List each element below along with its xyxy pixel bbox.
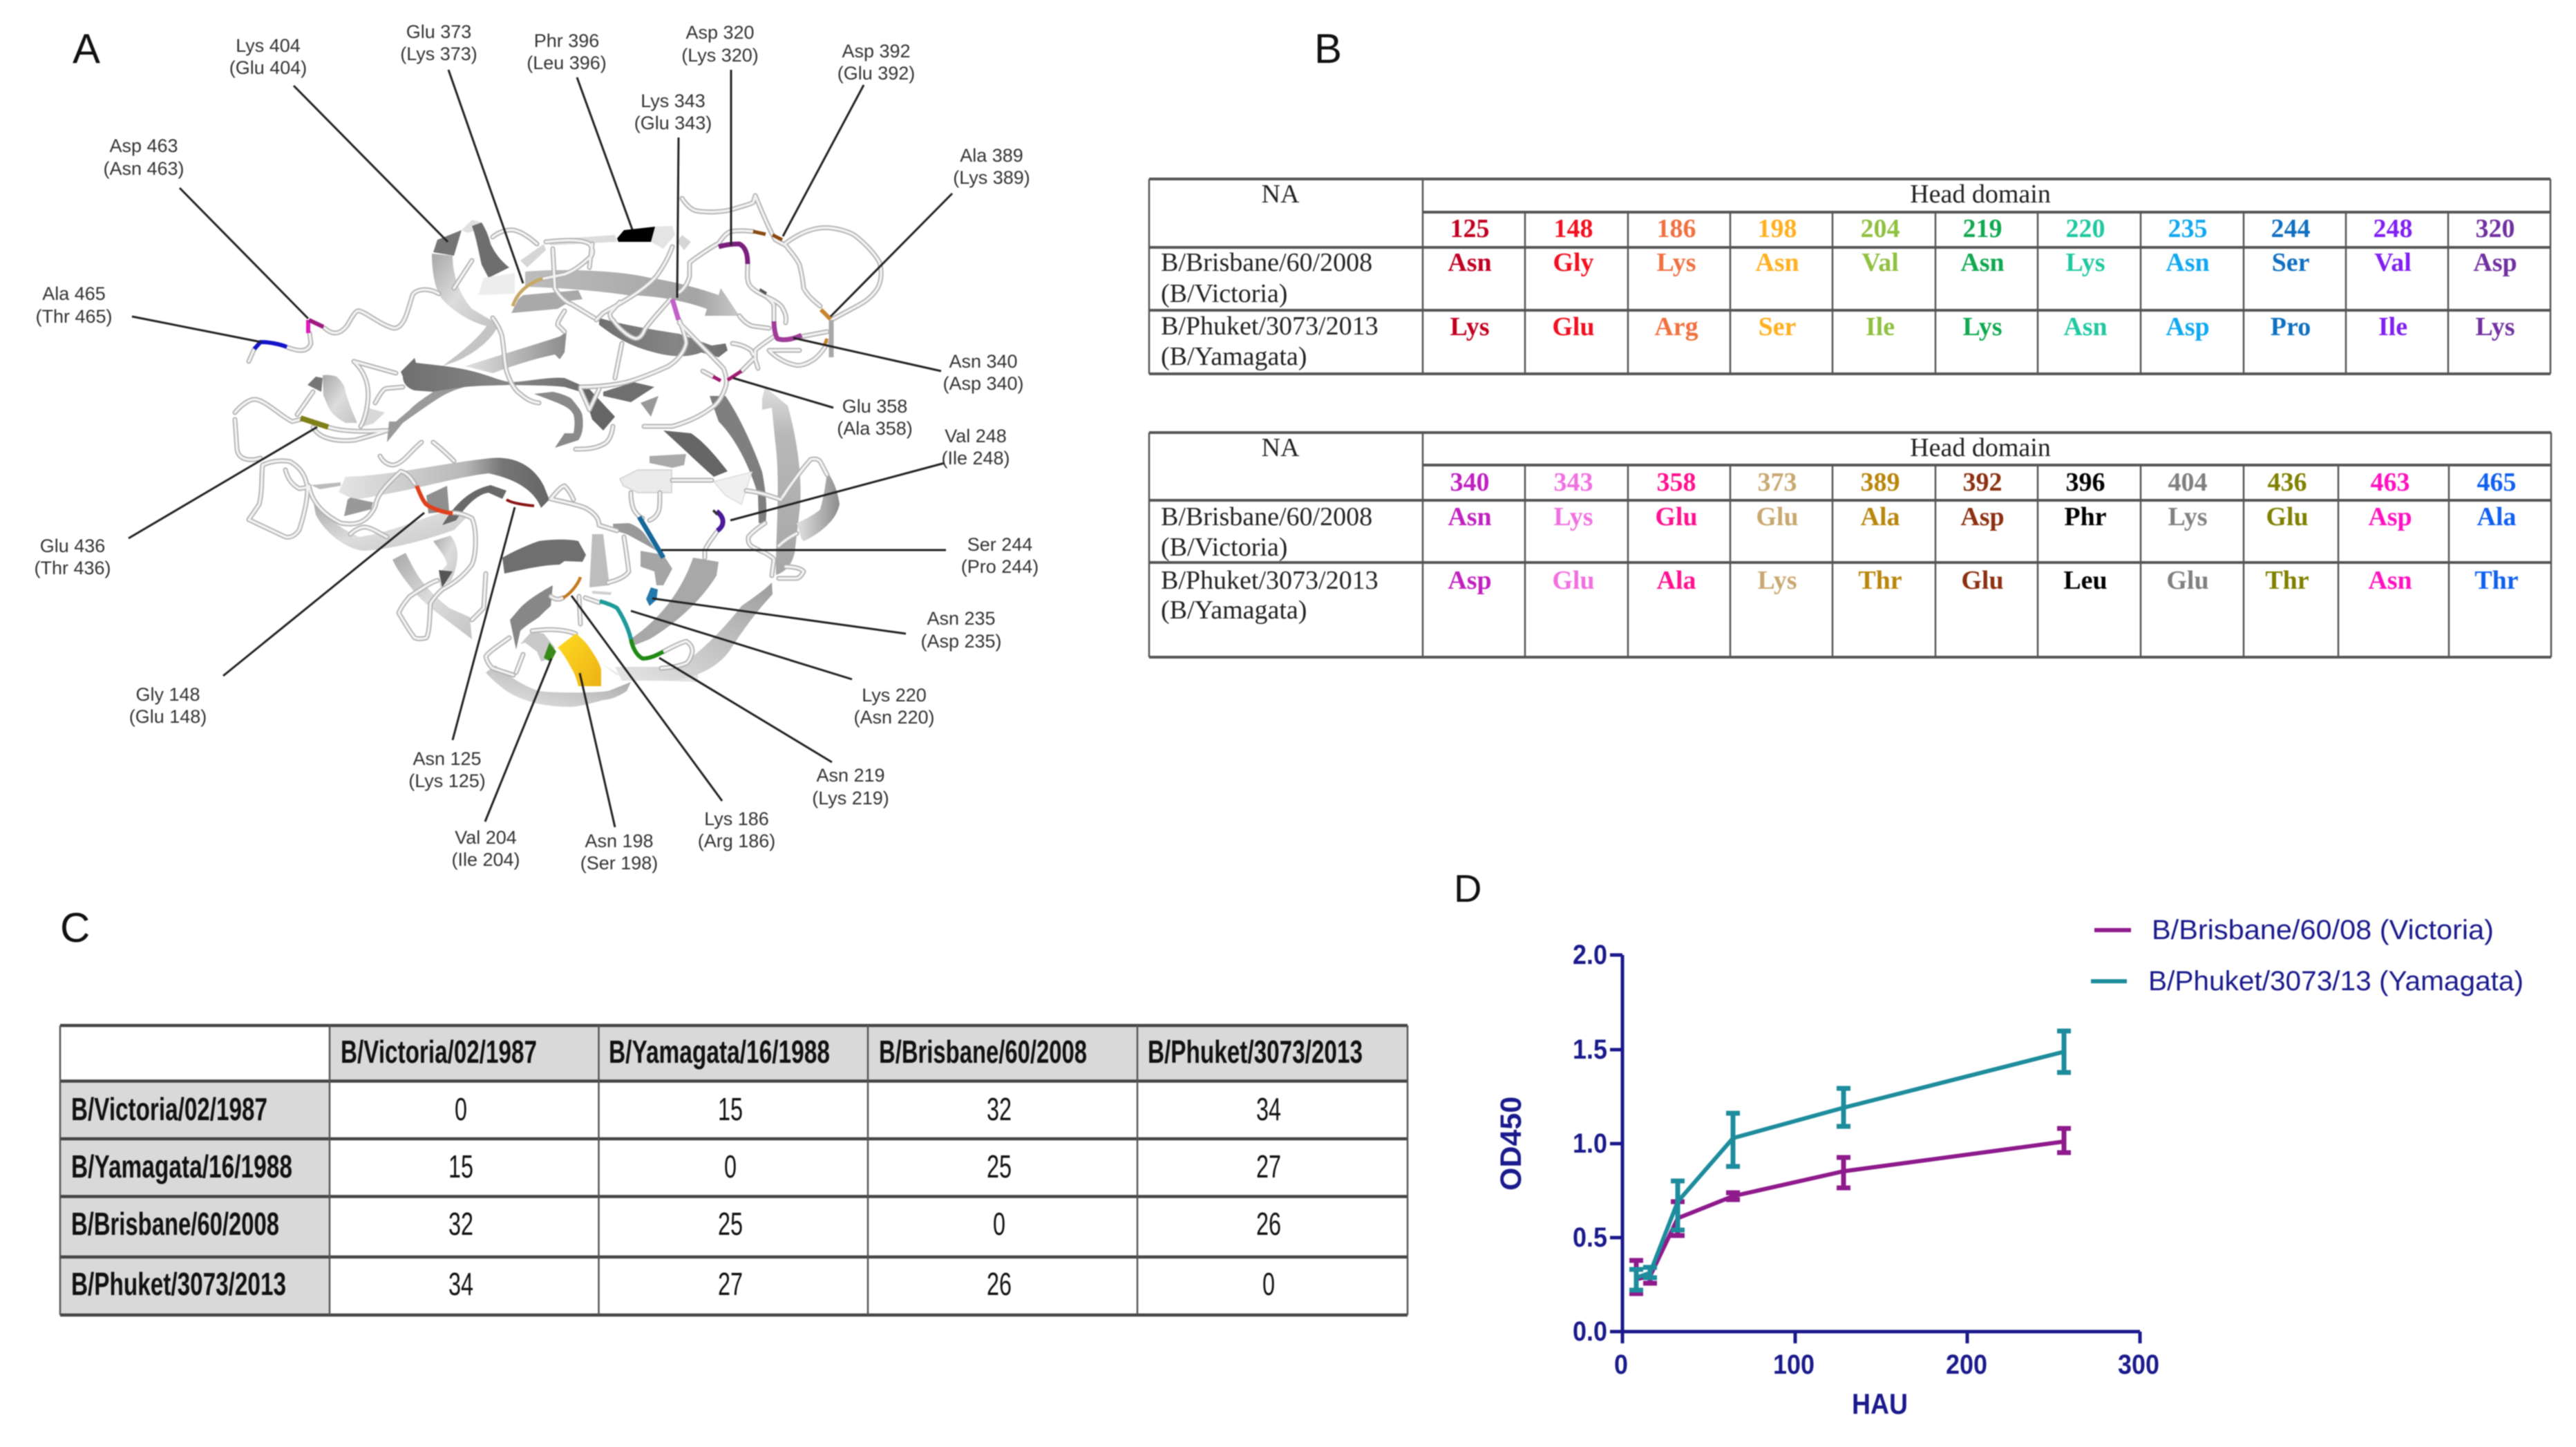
- panel C: pairwise difference table: 15: [718, 1091, 743, 1127]
- series: B/Brisbane/60/08 Victoria: [1629, 1128, 2071, 1294]
- y axis title: OD450: [1495, 1097, 1528, 1191]
- residue labels: (Ser 198): [580, 853, 658, 873]
- residue labels: Asp 320: [685, 22, 755, 43]
- panel B: table 1, residues 125 to 320: B/Phuket/3073/2013: [1161, 312, 1379, 341]
- panel B: table 1, residues 125 to 320: Asn: [1755, 248, 1799, 277]
- residue labels: (Leu 396): [527, 53, 607, 73]
- panel B: table 1, residues 125 to 320: Asp: [2473, 248, 2517, 277]
- residue labels: (Glu 343): [634, 113, 712, 133]
- panel B: table 2, residues 340 to 465: Glu: [2166, 566, 2209, 595]
- panel C: pairwise difference table: 34: [448, 1266, 473, 1302]
- panel B: table 2, residues 340 to 465: 396: [2066, 468, 2105, 497]
- panel B: table 1, residues 125 to 320: Val: [2374, 248, 2412, 277]
- panel B: table 2, residues 340 to 465: Glu: [1552, 566, 1595, 595]
- panel B: table 1, residues 125 to 320: Lys: [1450, 312, 1490, 341]
- panel D: line chart OD450 vs HAU: [1495, 915, 2523, 1420]
- panel B: table 1, residues 125 to 320: Lys: [2065, 248, 2105, 277]
- panel C: pairwise difference table: B/Brisbane/60/2008: [879, 1034, 1087, 1070]
- panel B: table 1, residues 125 to 320: 198: [1758, 214, 1797, 243]
- panel B: table 2, residues 340 to 465: (B/Yamagata): [1161, 596, 1307, 625]
- panel C: pairwise difference table: 0: [455, 1091, 467, 1127]
- chart axes: [1610, 955, 2140, 1343]
- residue labels: (Arg 186): [698, 831, 775, 851]
- panel B: table 2, residues 340 to 465: 463: [2370, 468, 2410, 497]
- residue labels: Lys 343: [641, 91, 705, 111]
- panel B: table 1, residues 125 to 320: 148: [1553, 214, 1593, 243]
- panel B: table 2, residues 340 to 465: Thr: [2474, 566, 2519, 595]
- panel B: table 2, residues 340 to 465: Asn: [1448, 502, 1492, 531]
- panel B: table 2, residues 340 to 465: 373: [1758, 468, 1797, 497]
- panel B: table 2, residues 340 to 465: 389: [1860, 468, 1900, 497]
- residue labels: (Lys 219): [812, 788, 889, 808]
- legend: B/Phuket/3073/13 (Yamagata): [2148, 966, 2523, 996]
- residue labels: Asn 340: [949, 351, 1018, 372]
- panel B: table 1, residues 125 to 320: 244: [2271, 214, 2311, 243]
- panel B: table 2, residues 340 to 465: Head domain: [1910, 433, 2051, 462]
- panel B: table 1, residues 125 to 320: Pro: [2271, 312, 2311, 341]
- panel letter: C: C: [60, 905, 90, 951]
- residue labels: Asn 219: [816, 765, 885, 786]
- residue labels: (Lys 320): [681, 45, 759, 66]
- panel B: table 2, residues 340 to 465: Glu: [2266, 502, 2309, 531]
- residue labels: Ala 389: [960, 145, 1023, 166]
- residue labels: Asn 198: [585, 831, 654, 851]
- panel B: table 2, residues 340 to 465: 404: [2168, 468, 2207, 497]
- panel letter: D: D: [1454, 867, 1481, 910]
- panel C: pairwise difference table: B/Phuket/3073/2013: [71, 1266, 286, 1302]
- legend: [2091, 915, 2523, 996]
- panel letter: B: B: [1314, 26, 1342, 72]
- ribbon: beta sheets: [307, 220, 840, 707]
- panel B: table 1, residues 125 to 320: Asp: [2166, 312, 2210, 341]
- residue labels: (Lys 389): [953, 167, 1030, 188]
- panel C: pairwise difference table: 0: [993, 1206, 1005, 1242]
- panel B: table 1, residues 125 to 320: 125: [1450, 214, 1490, 243]
- residue labels: Ser 244: [967, 534, 1032, 555]
- panel B: table 1, residues 125 to 320: Asn: [1448, 248, 1492, 277]
- panel B: table 1, residues 125 to 320: 320: [2475, 214, 2515, 243]
- panel B: table 2, residues 340 to 465: [1149, 433, 2551, 657]
- panel B: table 2, residues 340 to 465: Asp: [1448, 566, 1492, 595]
- panel B: table 1, residues 125 to 320: (B/Yamagata): [1161, 342, 1307, 371]
- panel B: table 2, residues 340 to 465: Glu: [1961, 566, 2004, 595]
- panel B: table 2, residues 340 to 465: Asn: [2368, 566, 2412, 595]
- residue labels: (Asp 235): [920, 631, 1002, 652]
- panel B: table 2, residues 340 to 465: Asp: [1960, 502, 2005, 531]
- panel C: pairwise difference table: B/Yamagata/16/1988: [609, 1034, 830, 1070]
- residue labels: (Asn 463): [103, 158, 184, 179]
- residue labels: Phr 396: [534, 30, 599, 51]
- panel B: table 2, residues 340 to 465: Ala: [1657, 566, 1696, 595]
- coloured residues on ribbon: [254, 231, 831, 659]
- panel B: table 2, residues 340 to 465: 343: [1553, 468, 1593, 497]
- residue labels: (Asp 340): [943, 373, 1024, 394]
- panel C: pairwise difference table: 25: [718, 1206, 743, 1242]
- panel B: table 1, residues 125 to 320: Arg: [1654, 312, 1698, 341]
- residue labels: Lys 220: [862, 685, 927, 706]
- residue labels: Asp 463: [109, 135, 178, 156]
- panel B: table 1, residues 125 to 320: Ile: [1866, 312, 1895, 341]
- panel B: table 1, residues 125 to 320: 235: [2168, 214, 2207, 243]
- panel B: table 1, residues 125 to 320: 204: [1860, 214, 1900, 243]
- panel B: table 2, residues 340 to 465: Lys: [1553, 502, 1593, 531]
- panel C: pairwise difference table: 26: [1256, 1206, 1281, 1242]
- panel C: pairwise difference table: B/Victoria/02/1987: [341, 1034, 537, 1070]
- panel C: pairwise difference table: B/Yamagata/16/1988: [71, 1148, 292, 1184]
- panel B: table 2, residues 340 to 465: Lys: [1757, 566, 1797, 595]
- panel B: table 2, residues 340 to 465: Ala: [1860, 502, 1900, 531]
- panel C: pairwise difference table: B/Brisbane/60/2008: [71, 1206, 279, 1242]
- panel C: pairwise difference table: 25: [987, 1148, 1012, 1184]
- panel C: pairwise difference table: 27: [1256, 1148, 1281, 1184]
- panel C: pairwise difference table: 0: [724, 1148, 737, 1184]
- panel B: table 2, residues 340 to 465: Thr: [1858, 566, 1902, 595]
- y axis tick labels: 2.0: [1573, 940, 1607, 970]
- x axis tick labels: 100: [1773, 1350, 1815, 1380]
- residue labels: (Ile 248): [941, 448, 1010, 469]
- residue labels: [34, 21, 1039, 873]
- panel B: table 1, residues 125 to 320: Gly: [1553, 248, 1594, 277]
- panel B: table 1, residues 125 to 320: (B/Victoria): [1161, 279, 1287, 308]
- residue labels: (Glu 392): [837, 63, 915, 84]
- residue labels: (Ile 204): [451, 849, 520, 870]
- panel C: pairwise difference table: 0: [1262, 1266, 1275, 1302]
- residue labels: Glu 358: [842, 396, 907, 417]
- panel B: table 1, residues 125 to 320: Asn: [1960, 248, 2005, 277]
- residue labels: (Asn 220): [853, 707, 935, 728]
- y axis tick labels: 1.5: [1573, 1034, 1607, 1065]
- residue labels: (Ala 358): [837, 418, 913, 439]
- panel B: table 1, residues 125 to 320: 219: [1962, 214, 2002, 243]
- residue labels: Glu 436: [40, 536, 105, 556]
- panel B: table 2, residues 340 to 465: 392: [1962, 468, 2002, 497]
- y axis tick labels: 0.0: [1573, 1316, 1607, 1347]
- panel B: table 1, residues 125 to 320: B/Brisbane/60/2008: [1161, 248, 1372, 277]
- x axis tick labels: 300: [2118, 1350, 2159, 1380]
- panel C: pairwise difference table: [60, 1025, 1408, 1315]
- x axis tick labels: 0: [1614, 1350, 1628, 1380]
- panel B: table 1, residues 125 to 320: Asn: [2063, 312, 2108, 341]
- residue labels: Val 204: [455, 827, 517, 848]
- residue labels: (Pro 244): [961, 556, 1039, 577]
- residue labels: (Thr 465): [35, 306, 113, 327]
- ribbon: connecting loops: [235, 196, 881, 675]
- residue labels: Asn 235: [927, 608, 996, 629]
- x axis tick labels: [1614, 1350, 2159, 1380]
- y axis tick labels: 1.0: [1573, 1128, 1607, 1159]
- residue labels: (Thr 436): [34, 558, 111, 578]
- panel C: pairwise difference table: 34: [1256, 1091, 1281, 1127]
- residue labels: (Glu 404): [229, 57, 307, 78]
- panel C: pairwise difference table: B/Phuket/3073/2013: [1148, 1034, 1363, 1070]
- panel B: table 2, residues 340 to 465: Glu: [1655, 502, 1698, 531]
- residue labels: Ala 465: [42, 283, 106, 304]
- panel B: table 2, residues 340 to 465: Lys: [2168, 502, 2208, 531]
- panel B: table 2, residues 340 to 465: B/Phuket/3073/2013: [1161, 566, 1379, 595]
- panel B: table 2, residues 340 to 465: (B/Victoria): [1161, 533, 1287, 562]
- y axis tick labels: 0.5: [1573, 1222, 1607, 1253]
- panel B: table 2, residues 340 to 465: Phr: [2064, 502, 2107, 531]
- panel C: pairwise difference table: 27: [718, 1266, 743, 1302]
- panel B: table 1, residues 125 to 320: NA: [1262, 180, 1300, 209]
- panel B: table 1, residues 125 to 320: Lys: [1962, 312, 2002, 341]
- panel C: pairwise difference table: 26: [987, 1266, 1012, 1302]
- panel letter: A: A: [73, 26, 100, 72]
- residue labels: (Glu 148): [129, 706, 207, 727]
- panel B: table 2, residues 340 to 465: 358: [1657, 468, 1696, 497]
- panel B: table 1, residues 125 to 320: 248: [2373, 214, 2413, 243]
- residue highlights: black, yellow, green, blue patches: [544, 227, 767, 686]
- panel B: table 2, residues 340 to 465: Ala: [2476, 502, 2517, 531]
- panel B: table 1, residues 125 to 320: Lys: [1656, 248, 1696, 277]
- panel B: table 2, residues 340 to 465: B/Brisbane/60/2008: [1161, 502, 1372, 531]
- panel B: table 1, residues 125 to 320: Ile: [2378, 312, 2407, 341]
- panel B: table 1, residues 125 to 320: Ser: [1759, 312, 1797, 341]
- residue labels: (Lys 125): [408, 770, 486, 791]
- residue labels: Lys 186: [704, 808, 769, 829]
- x axis tick labels: 200: [1946, 1350, 1987, 1380]
- panel C: pairwise difference table: 32: [987, 1091, 1012, 1127]
- residue labels: Glu 373: [406, 21, 471, 42]
- panel B: table 2, residues 340 to 465: Glu: [1756, 502, 1799, 531]
- panel C: pairwise difference table: 15: [448, 1148, 473, 1184]
- panel C: pairwise difference table: 32: [448, 1206, 473, 1242]
- panel B: table 1, residues 125 to 320: 220: [2066, 214, 2105, 243]
- panel C: pairwise difference table: B/Victoria/02/1987: [71, 1091, 267, 1127]
- panel B: table 1, residues 125 to 320: Head domain: [1910, 180, 2051, 209]
- panel B: table 2, residues 340 to 465: NA: [1262, 433, 1300, 462]
- panel B: table 2, residues 340 to 465: 465: [2476, 468, 2517, 497]
- panel B: table 1, residues 125 to 320: Ser: [2272, 248, 2310, 277]
- panel B: table 1, residues 125 to 320: [1149, 179, 2550, 374]
- leader lines from residues to labels: [129, 70, 952, 827]
- residue labels: Asp 392: [842, 41, 911, 62]
- panel B: table 2, residues 340 to 465: 340: [1450, 468, 1490, 497]
- residue labels: Gly 148: [135, 684, 200, 705]
- residue labels: Asn 125: [413, 748, 482, 769]
- panel B: table 1, residues 125 to 320: Asn: [2166, 248, 2210, 277]
- panel B: table 1, residues 125 to 320: Val: [1862, 248, 1899, 277]
- y axis tick labels: [1573, 940, 1607, 1347]
- series: B/Phuket/3073/13 Yamagata: [1629, 1031, 2071, 1290]
- panel B: table 2, residues 340 to 465: 436: [2268, 468, 2307, 497]
- panel B: table 2, residues 340 to 465: Asp: [2368, 502, 2412, 531]
- panel B: table 1, residues 125 to 320: Lys: [2475, 312, 2515, 341]
- panel B: table 2, residues 340 to 465: Thr: [2265, 566, 2309, 595]
- legend: B/Brisbane/60/08 (Victoria): [2152, 915, 2494, 945]
- x axis title: HAU: [1852, 1388, 1908, 1420]
- panel A: neuraminidase ribbon structure: [235, 196, 881, 707]
- residue labels: (Lys 373): [400, 44, 477, 64]
- panel B: table 1, residues 125 to 320: 186: [1657, 214, 1696, 243]
- panel B: table 1, residues 125 to 320: Glu: [1552, 312, 1595, 341]
- panel B: table 2, residues 340 to 465: Leu: [2063, 566, 2108, 595]
- residue labels: Val 248: [945, 426, 1007, 446]
- residue labels: Lys 404: [236, 35, 301, 56]
